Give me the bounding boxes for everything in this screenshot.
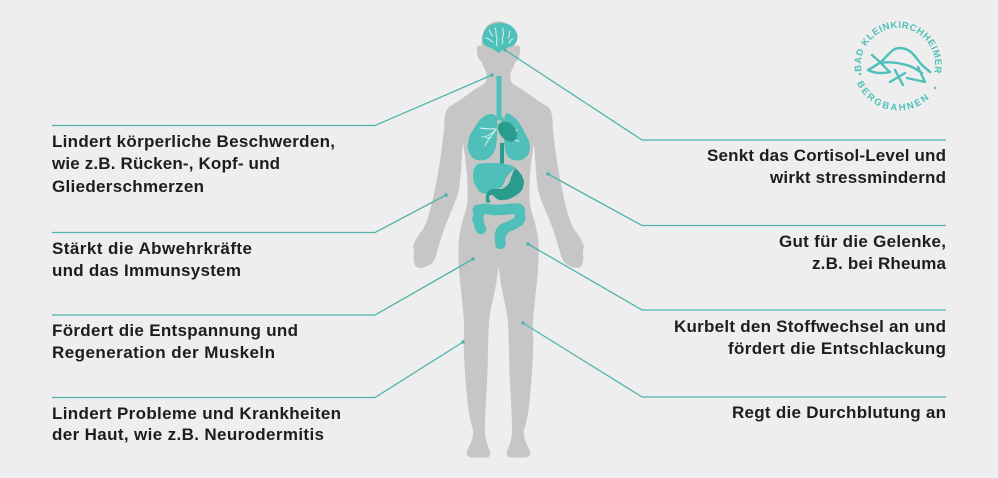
icon: intestine (472, 204, 526, 244)
logo: Bad Kleinkirchheimer Bergbahnen: BERGBAHNEN (857, 80, 929, 111)
text: muscles: Regeneration der Muskeln (52, 343, 275, 362)
icon: stomach (486, 168, 524, 202)
text: muscles (52, 321, 298, 362)
text: cortisol: wirkt stressmindernd (769, 168, 946, 187)
connector: cortisol (503, 48, 946, 140)
text: muscles: Fördert die Entspannung und (52, 321, 298, 340)
text: body ailments: Lindert körperliche Beschwerden, (52, 132, 335, 151)
connector: skin (52, 340, 465, 398)
logo: Bad Kleinkirchheimer Bergbahnen: BAD KLEINKIRCHHEIMER (854, 21, 942, 73)
text: body ailments: Gliederschmerzen (52, 177, 204, 196)
text: joints: Gut für die Gelenke, (779, 232, 946, 251)
left connector lines (52, 73, 494, 397)
text: body ailments (51, 132, 335, 196)
icon: lungs (468, 113, 530, 161)
icon: brain (482, 23, 518, 53)
right connector lines (503, 48, 946, 397)
internal organs (468, 23, 530, 244)
icon: heart (498, 122, 517, 142)
logo: Bad Kleinkirchheimer Bergbahnen (854, 21, 942, 111)
connector: muscles (52, 257, 475, 315)
text: body ailments: wie z.B. Rücken-, Kopf- und (51, 154, 280, 173)
text: joints: z.B. bei Rheuma (812, 254, 947, 273)
text: immune system (52, 239, 252, 280)
logo mark (868, 48, 930, 85)
text: cortisol (707, 146, 946, 187)
text: skin: Lindert Probleme und Krankheiten (52, 404, 341, 423)
text: immune system: Stärkt die Abwehrkräfte (52, 239, 252, 258)
text: metabolism: fördert die Entschlackung (728, 339, 946, 358)
icon: windpipe (492, 76, 506, 123)
human body silhouette (413, 21, 584, 458)
text: skin: der Haut, wie z.B. Neurodermitis (52, 425, 324, 444)
text: circulation: Regt die Durchblutung an (732, 403, 946, 422)
text: joints (779, 232, 947, 273)
text: skin (52, 404, 341, 444)
connector: immune system (52, 193, 448, 232)
text: metabolism (674, 317, 946, 358)
icon: esophagus (500, 143, 504, 167)
text: metabolism: Kurbelt den Stoffwechsel an und (674, 317, 946, 336)
icon: liver (473, 163, 515, 194)
connector: circulation (521, 321, 946, 397)
connector: joints (546, 172, 946, 226)
text: cortisol: Senkt das Cortisol-Level und (707, 146, 946, 165)
connector: metabolism (526, 242, 946, 310)
connector: body ailments (52, 73, 494, 126)
text: immune system: und das Immunsystem (52, 261, 241, 280)
